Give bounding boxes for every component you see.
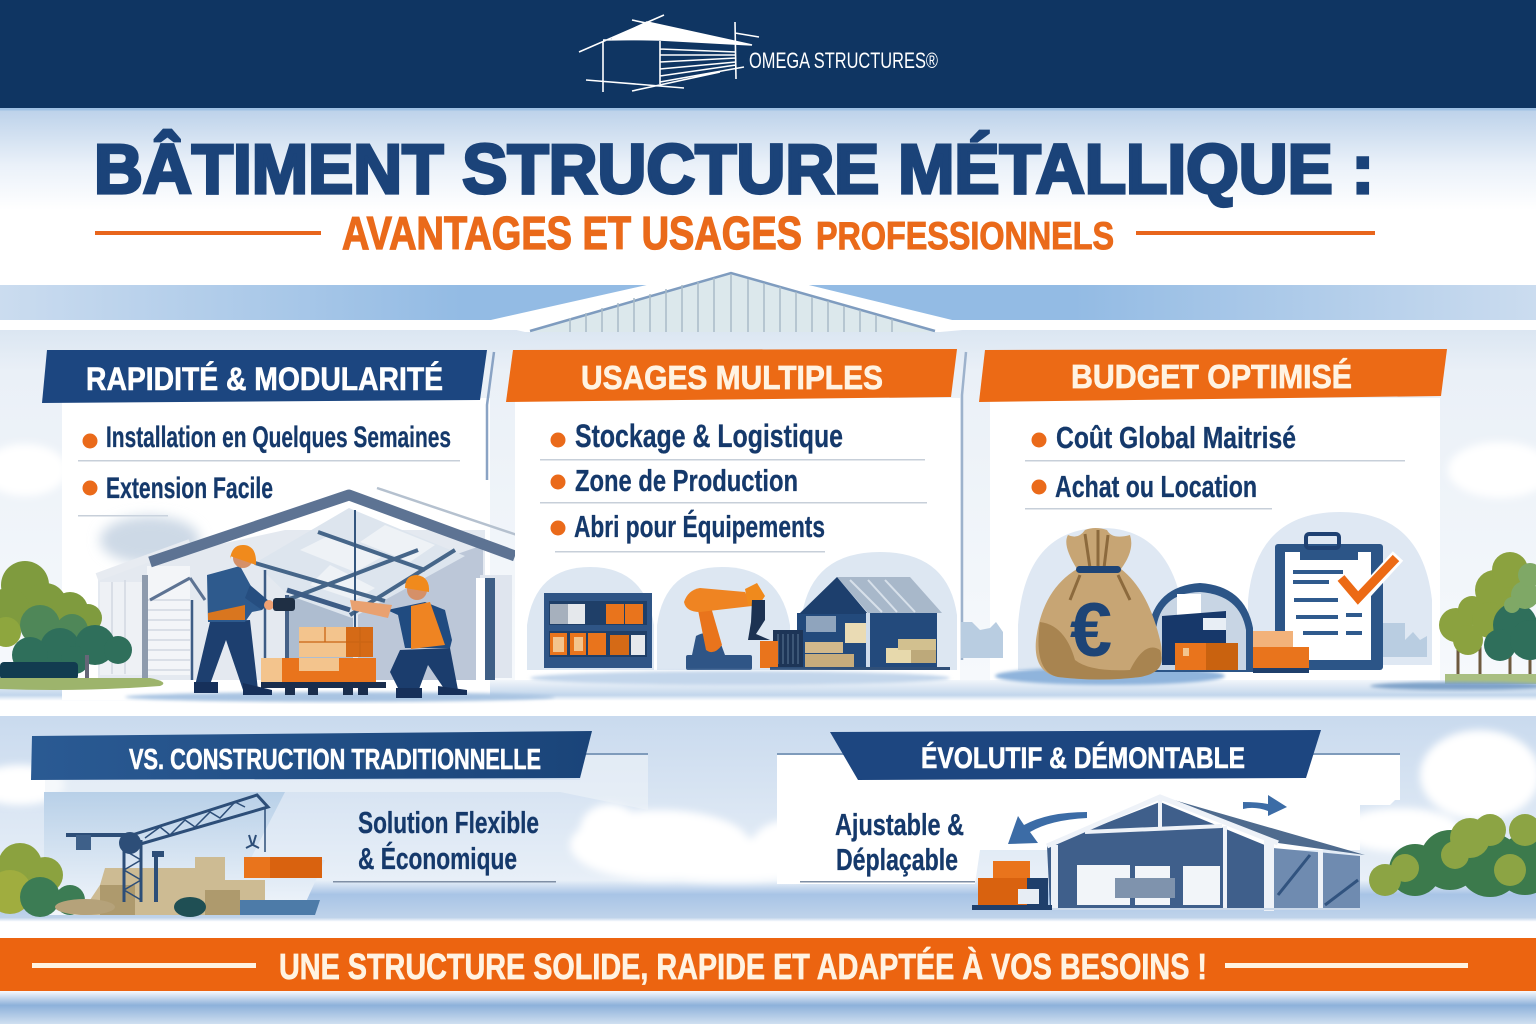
ground shadow [995, 667, 1225, 685]
header bar [0, 0, 1536, 108]
worker right [350, 575, 467, 698]
logo wordmark: OMEGA STRUCTURES® [749, 48, 938, 73]
bullet: coût: Coût Global Maitrisé [1056, 420, 1296, 455]
footer banner [0, 938, 1536, 991]
panel body [45, 754, 648, 810]
right post [480, 575, 512, 678]
subtitle [95, 207, 1375, 259]
icon: robot arm [684, 583, 770, 670]
euro symbol: € [1070, 588, 1112, 673]
ground shadow [1370, 682, 1536, 690]
logo icon: building sketch [579, 15, 759, 92]
panel heading [979, 349, 1447, 402]
pallet with boxes [261, 627, 386, 695]
panel body [777, 754, 1400, 884]
icon: boxes [972, 861, 1052, 910]
panel heading: ÉVOLUTIF & DÉMONTABLE [921, 741, 1245, 775]
icon: small building [1148, 583, 1253, 672]
panel heading [42, 350, 487, 403]
panel: budget optimisé [961, 349, 1536, 690]
footer banner: UNE STRUCTURE SOLIDE, RAPIDE ET ADAPTÉE À VOS BESOINS ! [279, 946, 1207, 987]
icon: clipboard with check [1253, 534, 1398, 673]
bullet: coût [1025, 420, 1405, 462]
illustration arches [527, 552, 957, 670]
panel heading: BUDGET OPTIMISÉ [1071, 358, 1352, 395]
subtitle: AVANTAGES ET USAGES [342, 207, 802, 259]
bullet: stockage: Stockage & Logistique [575, 418, 843, 454]
skyline [961, 622, 1427, 658]
panel heading [506, 349, 957, 402]
bullet: production [540, 463, 927, 504]
panel: évolutif et démontable [777, 730, 1536, 911]
suspended orange block [244, 857, 322, 878]
bullet: abri [550, 509, 825, 552]
tree left [0, 561, 163, 690]
arrow left [1008, 812, 1087, 844]
panel: vs. construction traditionnelle [0, 731, 648, 917]
panel: usages multiples [506, 349, 966, 685]
logo: Omega Structures [579, 15, 938, 92]
illustration arches [1018, 512, 1432, 670]
back walls [98, 530, 485, 680]
bullet: installation: Installation en Quelques Semaines [106, 421, 451, 454]
illustration: workers assembling a metal building [0, 488, 555, 702]
bullet: installation [78, 421, 460, 462]
text: ajustable: Ajustable & [835, 807, 964, 842]
panel heading [31, 731, 592, 780]
bullet: abri: Abri pour Équipements [574, 509, 825, 544]
panel body [990, 398, 1440, 680]
panel heading: RAPIDITÉ & MODULARITÉ [86, 361, 443, 397]
panel: rapidité et modularité [0, 350, 555, 702]
roof glazing [255, 508, 465, 618]
panel rule [777, 753, 1400, 755]
panel body [62, 398, 490, 700]
icon: movable building [1047, 796, 1365, 911]
panel rule [586, 753, 648, 755]
arrow right [1243, 795, 1287, 816]
roof frame [97, 488, 517, 680]
icon: money bag with euro [1036, 528, 1162, 680]
subtitle: PROFESSIONNELS [816, 215, 1114, 258]
panel heading [830, 730, 1321, 780]
ground shadow [530, 671, 950, 685]
text: ajustable: Déplaçable [836, 842, 958, 877]
bullet: extension: Extension Facile [106, 472, 273, 505]
text: solution flexible [333, 805, 556, 882]
illustration: crane construction site [0, 792, 325, 917]
header underline [0, 108, 1536, 110]
worker left [194, 545, 295, 695]
bullet: achat: Achat ou Location [1055, 469, 1257, 504]
text: solution flexible: & Économique [358, 841, 517, 876]
title: BÂTIMENT STRUCTURE MÉTALLIQUE : [94, 129, 1374, 208]
sky behind building [100, 516, 200, 564]
icon: storage building [760, 577, 950, 670]
soft clouds [0, 442, 1536, 882]
ground shadow [125, 692, 555, 702]
tree right [1439, 552, 1536, 684]
bullet: extension [78, 472, 273, 516]
panel heading: VS. CONSTRUCTION TRADITIONNELLE [129, 744, 541, 776]
icon: warehouse shelving [544, 593, 652, 668]
panel body [515, 398, 960, 680]
panel side rule [487, 352, 494, 480]
bullet: production: Zone de Production [575, 463, 798, 498]
roof illustration behind panels [482, 266, 985, 332]
text: ajustable [800, 807, 975, 882]
bullet: achat [1025, 469, 1272, 510]
panel side rule [962, 352, 966, 660]
trees right [1369, 814, 1536, 897]
text: solution flexible: Solution Flexible [358, 805, 539, 840]
panel heading: USAGES MULTIPLES [581, 359, 883, 396]
